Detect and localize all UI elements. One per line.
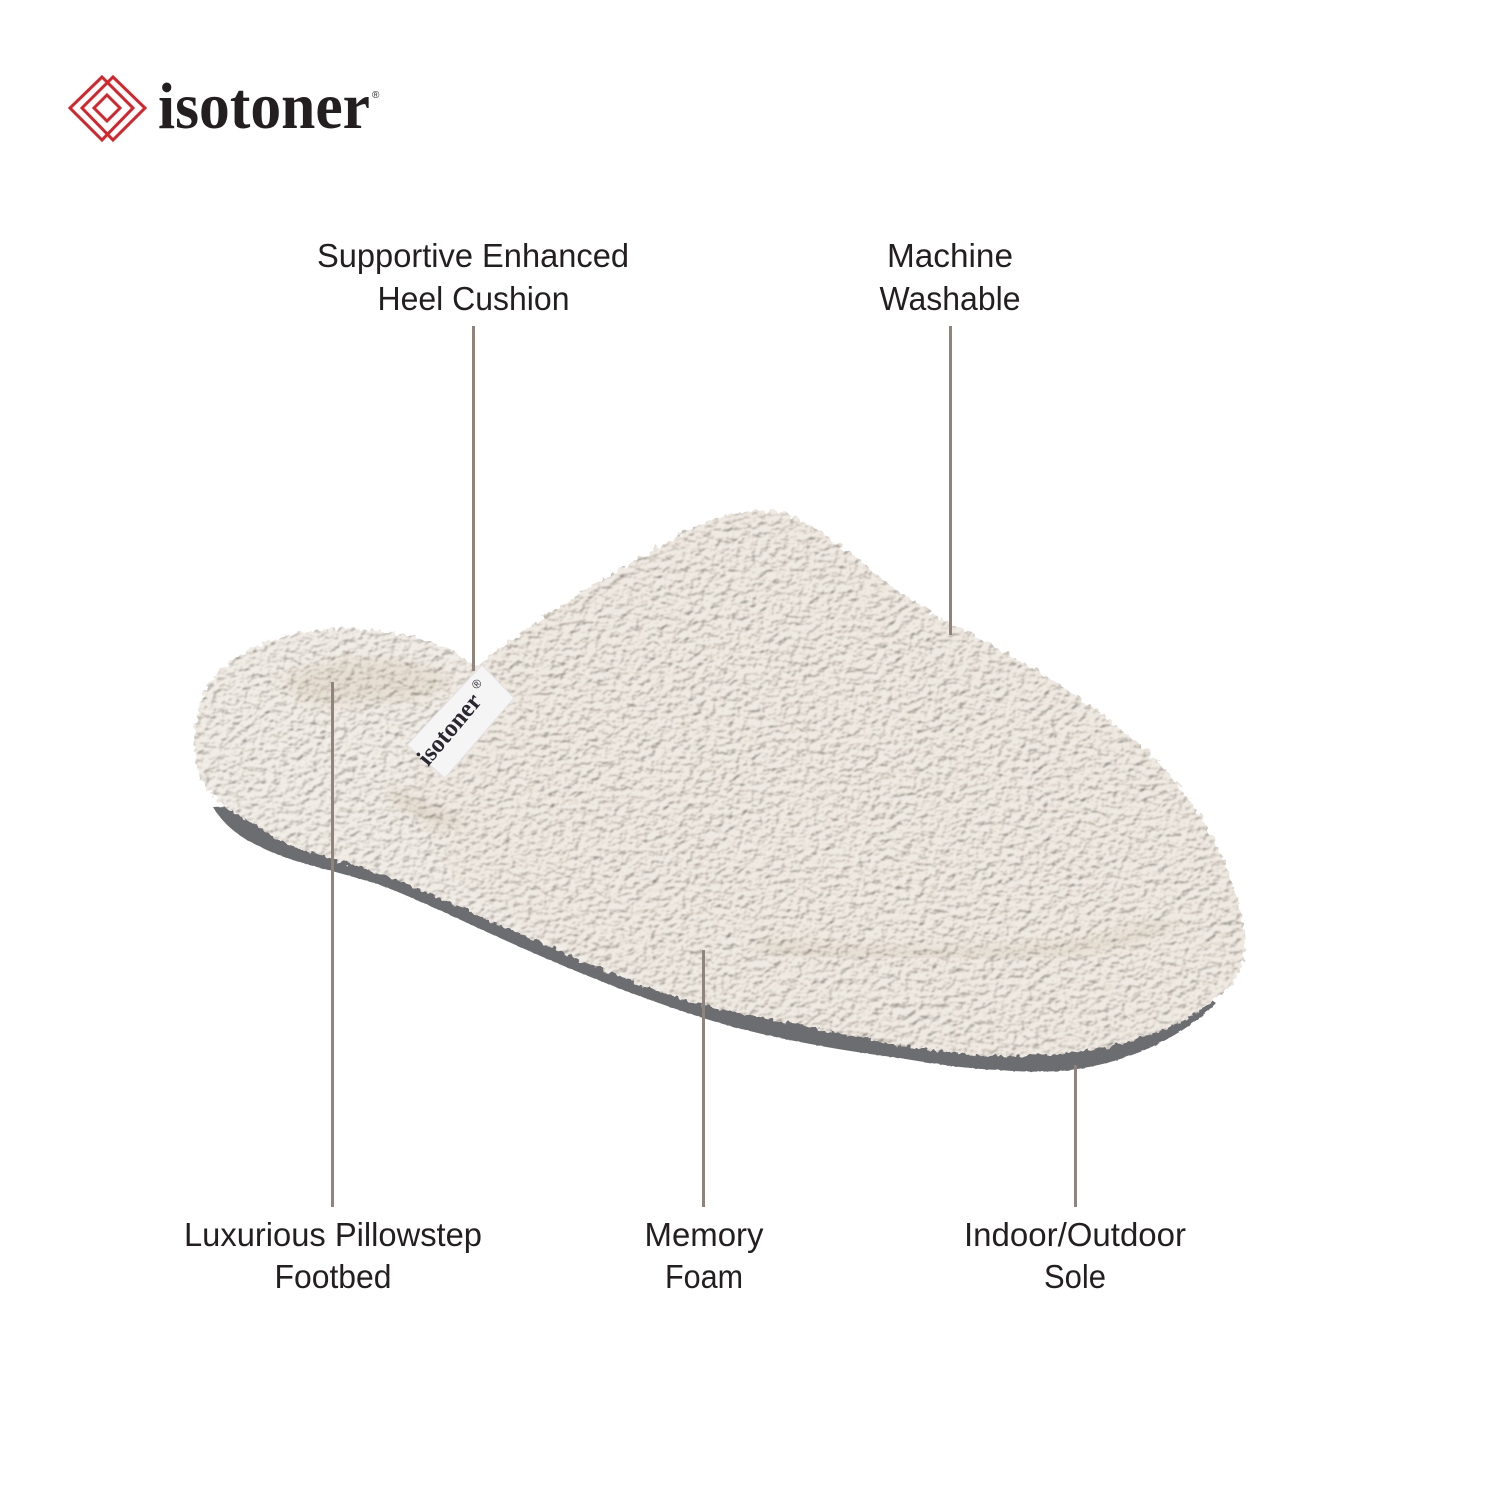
- callout: Memory Foam: [644, 950, 764, 1295]
- callout text: Supportive Enhanced: [317, 237, 629, 274]
- brand tag: [407, 665, 514, 778]
- callout: Supportive Enhanced Heel Cushion: [317, 237, 629, 671]
- callout text line 2: Foam: [665, 1258, 743, 1295]
- tag fabric: [407, 665, 514, 778]
- icon: red nested diamonds: [70, 77, 145, 140]
- callout text line 2: Heel Cushion: [378, 280, 570, 317]
- callout text line 2: Washable: [880, 280, 1020, 317]
- callout text: Luxurious Pillowstep: [184, 1216, 482, 1253]
- callout: Machine Washable: [880, 237, 1020, 635]
- leader line: [472, 326, 475, 671]
- tag registered mark: ®: [469, 676, 485, 692]
- leader line: [949, 326, 952, 635]
- shadow inside heel opening: [280, 659, 455, 705]
- slipper footbed: [195, 628, 800, 1005]
- slipper upper and front rim: [415, 510, 1245, 1056]
- registered mark: ®: [372, 90, 380, 101]
- leader line: [702, 950, 705, 1207]
- slipper sole: [213, 800, 1216, 1072]
- callout text: Indoor/Outdoor: [964, 1216, 1186, 1253]
- callout: Luxurious Pillowstep Footbed: [184, 682, 482, 1295]
- leader line: [1074, 1065, 1077, 1207]
- logo: isotoner: [70, 70, 380, 143]
- callout text line 2: Sole: [1044, 1258, 1106, 1295]
- tag text: isotoner: [412, 688, 487, 771]
- callout text line 2: Footbed: [274, 1258, 392, 1295]
- leader line: [331, 682, 334, 1207]
- callout text: Memory: [644, 1216, 764, 1253]
- callout: Indoor/Outdoor Sole: [964, 1065, 1186, 1295]
- callout text: Machine: [887, 237, 1013, 274]
- slipper photo illustration: [195, 510, 1245, 1072]
- logo wordmark: isotoner: [158, 70, 370, 143]
- footbed to upper fold shadow: [392, 785, 470, 827]
- rim seam on toe: [760, 922, 1170, 955]
